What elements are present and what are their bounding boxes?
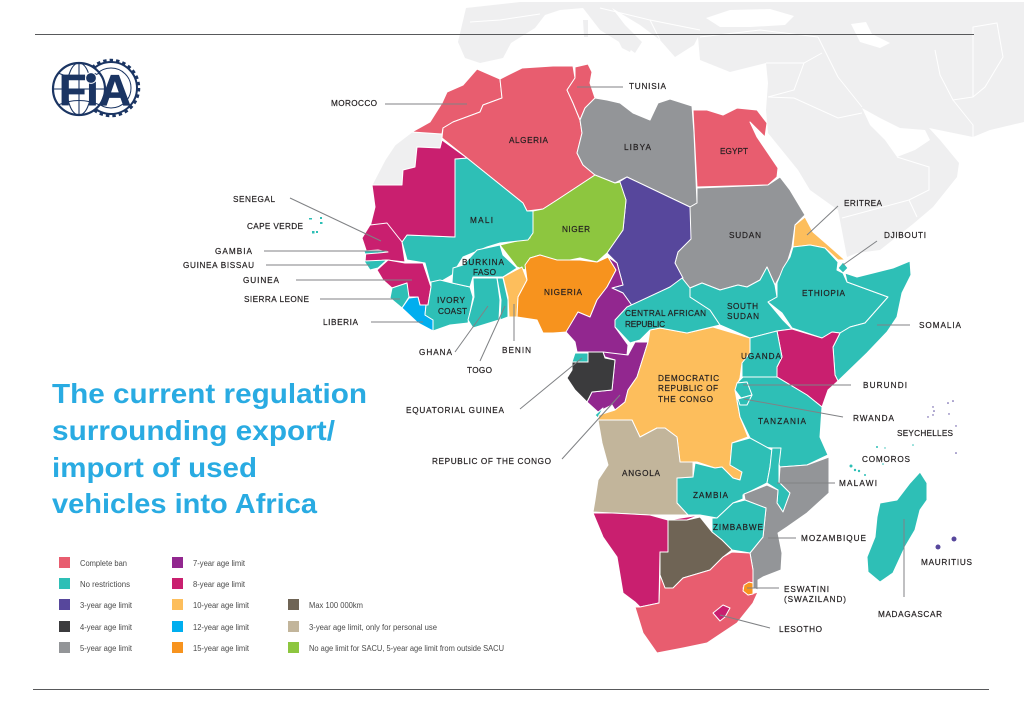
legend: 12-year: 12-year age limit (193, 623, 250, 632)
country: Mauritania (370, 140, 467, 242)
legend: max km: Max 100 000km (309, 601, 363, 610)
label: Mali: MALI (470, 216, 493, 225)
leader: Sierra Leone (320, 298, 400, 300)
legend: max km (288, 599, 363, 610)
leader: Equatorial Guinea (520, 358, 582, 409)
legend: 8-year: 8-year age limit (193, 580, 246, 589)
label: South Sudan (727, 302, 759, 321)
label: Niger: NIGER (562, 225, 590, 234)
label: Zimbabwe: ZIMBABWE (713, 523, 764, 532)
label: Seychelles: SEYCHELLES (897, 429, 954, 438)
legend: 15-year: 15-year age limit (193, 644, 250, 653)
globe (53, 63, 105, 115)
legend: 4-year: 4-year age limit (80, 623, 133, 632)
country: Namibia (593, 513, 700, 607)
legend (59, 557, 504, 653)
country: Mali (402, 158, 533, 282)
country: Senegal (362, 223, 405, 262)
legend: 4-year (59, 621, 133, 632)
country: Malawi (767, 448, 790, 512)
label: Morocco: MOROCCO (331, 99, 377, 108)
leader: Benin (513, 304, 515, 341)
country: Eritrea (793, 217, 845, 260)
label: Equatorial Guinea: EQUATORIAL GUINEA (406, 406, 505, 415)
title line 3: import of used (52, 452, 257, 483)
leader: Rwanda (744, 399, 843, 417)
country: Djibouti (838, 262, 848, 273)
leader: Guinea (296, 279, 412, 281)
country: Tanzania (737, 377, 828, 467)
legend: SACU: No age limit for SACU, 5-year age limit from outside SACU (309, 644, 504, 653)
country: Eswatini (743, 582, 753, 595)
leader: Ghana (455, 306, 488, 352)
label: Burkina Faso: FASO (473, 268, 496, 277)
leader: Mozambique (768, 537, 796, 539)
country: Tunisia (567, 64, 595, 120)
label: Algeria: ALGERIA (509, 136, 549, 145)
leader: Eswatini (747, 587, 779, 589)
label: Guinea: GUINEA (243, 276, 280, 285)
country: Mozambique (744, 457, 829, 590)
country: Ghana (468, 278, 500, 328)
label: Liberia: LIBERIA (323, 318, 359, 327)
label: Egypt: EGYPT (720, 147, 748, 156)
country: Morocco (412, 69, 502, 134)
label: Comoros: COMOROS (862, 455, 911, 464)
country: Madagascar (867, 472, 927, 582)
wordmark: FiA (59, 66, 131, 115)
FIA logo (53, 60, 138, 116)
leader: Morocco (385, 103, 467, 105)
background map: Europe and Middle East (372, 2, 1024, 257)
country: Central African Republic (615, 278, 720, 343)
label: Democratic Republic of the Congo: DEMOCRATIC (658, 374, 719, 383)
country: Somalia (833, 261, 911, 381)
label: Burkina Faso (462, 258, 505, 277)
leader: Burundi (743, 384, 851, 386)
label: Ethiopia: ETHIOPIA (802, 289, 846, 298)
leader: Lesotho (720, 615, 770, 628)
label: Gambia: GAMBIA (215, 247, 253, 256)
legend: 12-year (172, 621, 250, 632)
country: Libya (577, 98, 697, 207)
label: Libya: LIBYA (624, 143, 652, 152)
leader: Somalia (877, 324, 910, 326)
leader: Republic of the Congo (562, 395, 620, 459)
label: Democratic Republic of the Congo: REPUBLIC OF (658, 384, 718, 393)
legend: 5-year: 5-year age limit (80, 644, 133, 653)
label: Central African Republic: CENTRAL AFRICAN (625, 309, 706, 318)
label: Uganda: UGANDA (741, 352, 782, 361)
gear ring (84, 60, 138, 116)
leader: Togo (480, 306, 505, 361)
country: Burundi (735, 382, 752, 398)
i dot (86, 73, 96, 83)
label: Ivory Coast: COAST (438, 307, 467, 316)
label: Mozambique: MOZAMBIQUE (801, 534, 867, 543)
country: Egypt (693, 108, 778, 187)
legend: 10-year (172, 599, 250, 610)
legend: personal use: 3-year age limit, only for personal use (309, 623, 438, 632)
country: Ethiopia (768, 245, 888, 338)
label: Republic of the Congo: REPUBLIC OF THE CONGO (432, 457, 551, 466)
legend: 15-year (172, 642, 250, 653)
label: Sudan: SUDAN (729, 231, 761, 240)
country: Cabinda (595, 408, 603, 418)
legend: no restrictions (59, 578, 130, 589)
label: Eswatini (784, 585, 846, 604)
label: Central African Republic: REPUBLIC (625, 320, 665, 329)
leader: Senegal (290, 198, 381, 241)
country: Uganda (742, 331, 782, 377)
label: Cape Verde: CAPE VERDE (247, 222, 304, 231)
label: Guinea Bissau: GUINEA BISSAU (183, 261, 254, 270)
leader: Madagascar (903, 519, 905, 597)
country: Niger (500, 175, 626, 270)
leader lines (264, 87, 910, 628)
country: Zimbabwe (712, 500, 766, 553)
label: Nigeria: NIGERIA (544, 288, 583, 297)
legend: no restrictions: No restrictions (80, 580, 130, 589)
islands: Mauritius (936, 536, 956, 550)
islands: Seychelles (927, 400, 957, 454)
country: Benin (503, 267, 527, 317)
legend: 7-year: 7-year age limit (193, 559, 246, 568)
label: Rwanda: RWANDA (853, 414, 895, 423)
country: South Sudan (690, 267, 792, 338)
label: Eswatini: ESWATINI (784, 585, 829, 594)
title line 2: surrounding export/ (52, 415, 335, 446)
country: Kenya (777, 329, 840, 407)
label: Burkina Faso: BURKINA (462, 258, 505, 267)
label: Benin: BENIN (502, 346, 531, 355)
country: Sierra Leone (390, 283, 409, 308)
leader: Gambia (264, 250, 387, 252)
country: Equatorial Guinea (572, 353, 588, 362)
label: Eritrea: ERITREA (844, 199, 883, 208)
top rule (35, 34, 974, 36)
country: Zambia (677, 438, 772, 518)
label: Ghana: GHANA (419, 348, 453, 357)
country: Gambia (364, 250, 388, 254)
label: Madagascar: MADAGASCAR (878, 610, 942, 619)
label: Djibouti: DJIBOUTI (884, 231, 926, 240)
title line 1: The current regulation (52, 378, 367, 409)
leader: Guinea Bissau (266, 264, 370, 266)
leader: Eritrea (807, 206, 838, 235)
country: Chad (607, 177, 691, 307)
legend: 3-year (59, 599, 133, 610)
title line 4: vehicles into Africa (52, 488, 317, 519)
label: Mauritius: MAURITIUS (921, 558, 973, 567)
label: Togo: TOGO (467, 366, 492, 375)
country: Rwanda (738, 395, 752, 405)
label: Angola: ANGOLA (622, 469, 661, 478)
label: Ivory Coast: IVORY (437, 296, 466, 305)
country: Democratic Republic of the Congo (598, 327, 750, 480)
legend: 8-year (172, 578, 246, 589)
country: Burkina Faso (452, 245, 517, 287)
label: South Sudan: SOUTH (727, 302, 758, 311)
label: Sierra Leone: SIERRA LEONE (244, 295, 310, 304)
country: Gabon (567, 352, 615, 402)
label: Ivory Coast (437, 296, 467, 316)
label: Eswatini: (SWAZILAND) (784, 595, 846, 604)
label: Central African Republic (625, 309, 706, 329)
map of Africa (309, 64, 957, 653)
islands: Cape Verde (309, 217, 322, 234)
country: Sudan (675, 177, 805, 290)
country: Angola (593, 420, 693, 515)
label: South Sudan: SUDAN (727, 312, 759, 321)
label: Tunisia: TUNISIA (629, 82, 667, 91)
country: Cameroon (566, 257, 633, 355)
legend: personal use (288, 621, 438, 632)
islands: Comoros (850, 444, 914, 476)
country: Togo (497, 278, 508, 320)
label: Senegal: SENEGAL (233, 195, 275, 204)
country: Republic of the Congo (587, 342, 648, 412)
label: Tanzania: TANZANIA (758, 417, 807, 426)
country: Liberia (402, 297, 433, 331)
label: Zambia: ZAMBIA (693, 491, 729, 500)
country: Guinea (377, 260, 431, 305)
title (52, 378, 367, 519)
country: Lesotho (713, 605, 730, 621)
bottom rule (33, 688, 989, 690)
country labels (183, 82, 973, 634)
country: South Africa (635, 552, 758, 653)
legend: complete ban (59, 557, 127, 568)
label: Democratic Republic of the Congo: THE CONGO (658, 395, 713, 404)
label: Democratic Republic of the Congo (658, 374, 719, 404)
legend: 10-year: 10-year age limit (193, 601, 250, 610)
leader: Tunisia (577, 86, 623, 88)
legend: 5-year (59, 642, 133, 653)
country: Algeria (442, 66, 595, 211)
label: Somalia: SOMALIA (919, 321, 962, 330)
legend: complete ban: Complete ban (80, 559, 127, 568)
legend: 7-year (172, 557, 246, 568)
country: Guinea Bissau (364, 260, 387, 270)
leader: Malawi (777, 482, 835, 484)
country: Botswana (660, 517, 732, 588)
label: Malawi: MALAWI (839, 479, 877, 488)
legend: 3-year: 3-year age limit (80, 601, 133, 610)
leader: Djibouti (843, 241, 877, 265)
country: Ivory Coast (425, 280, 473, 331)
label: Burundi: BURUNDI (863, 381, 907, 390)
leader: Liberia (371, 321, 423, 323)
label: Lesotho: LESOTHO (779, 625, 822, 634)
country: Nigeria (517, 255, 616, 333)
